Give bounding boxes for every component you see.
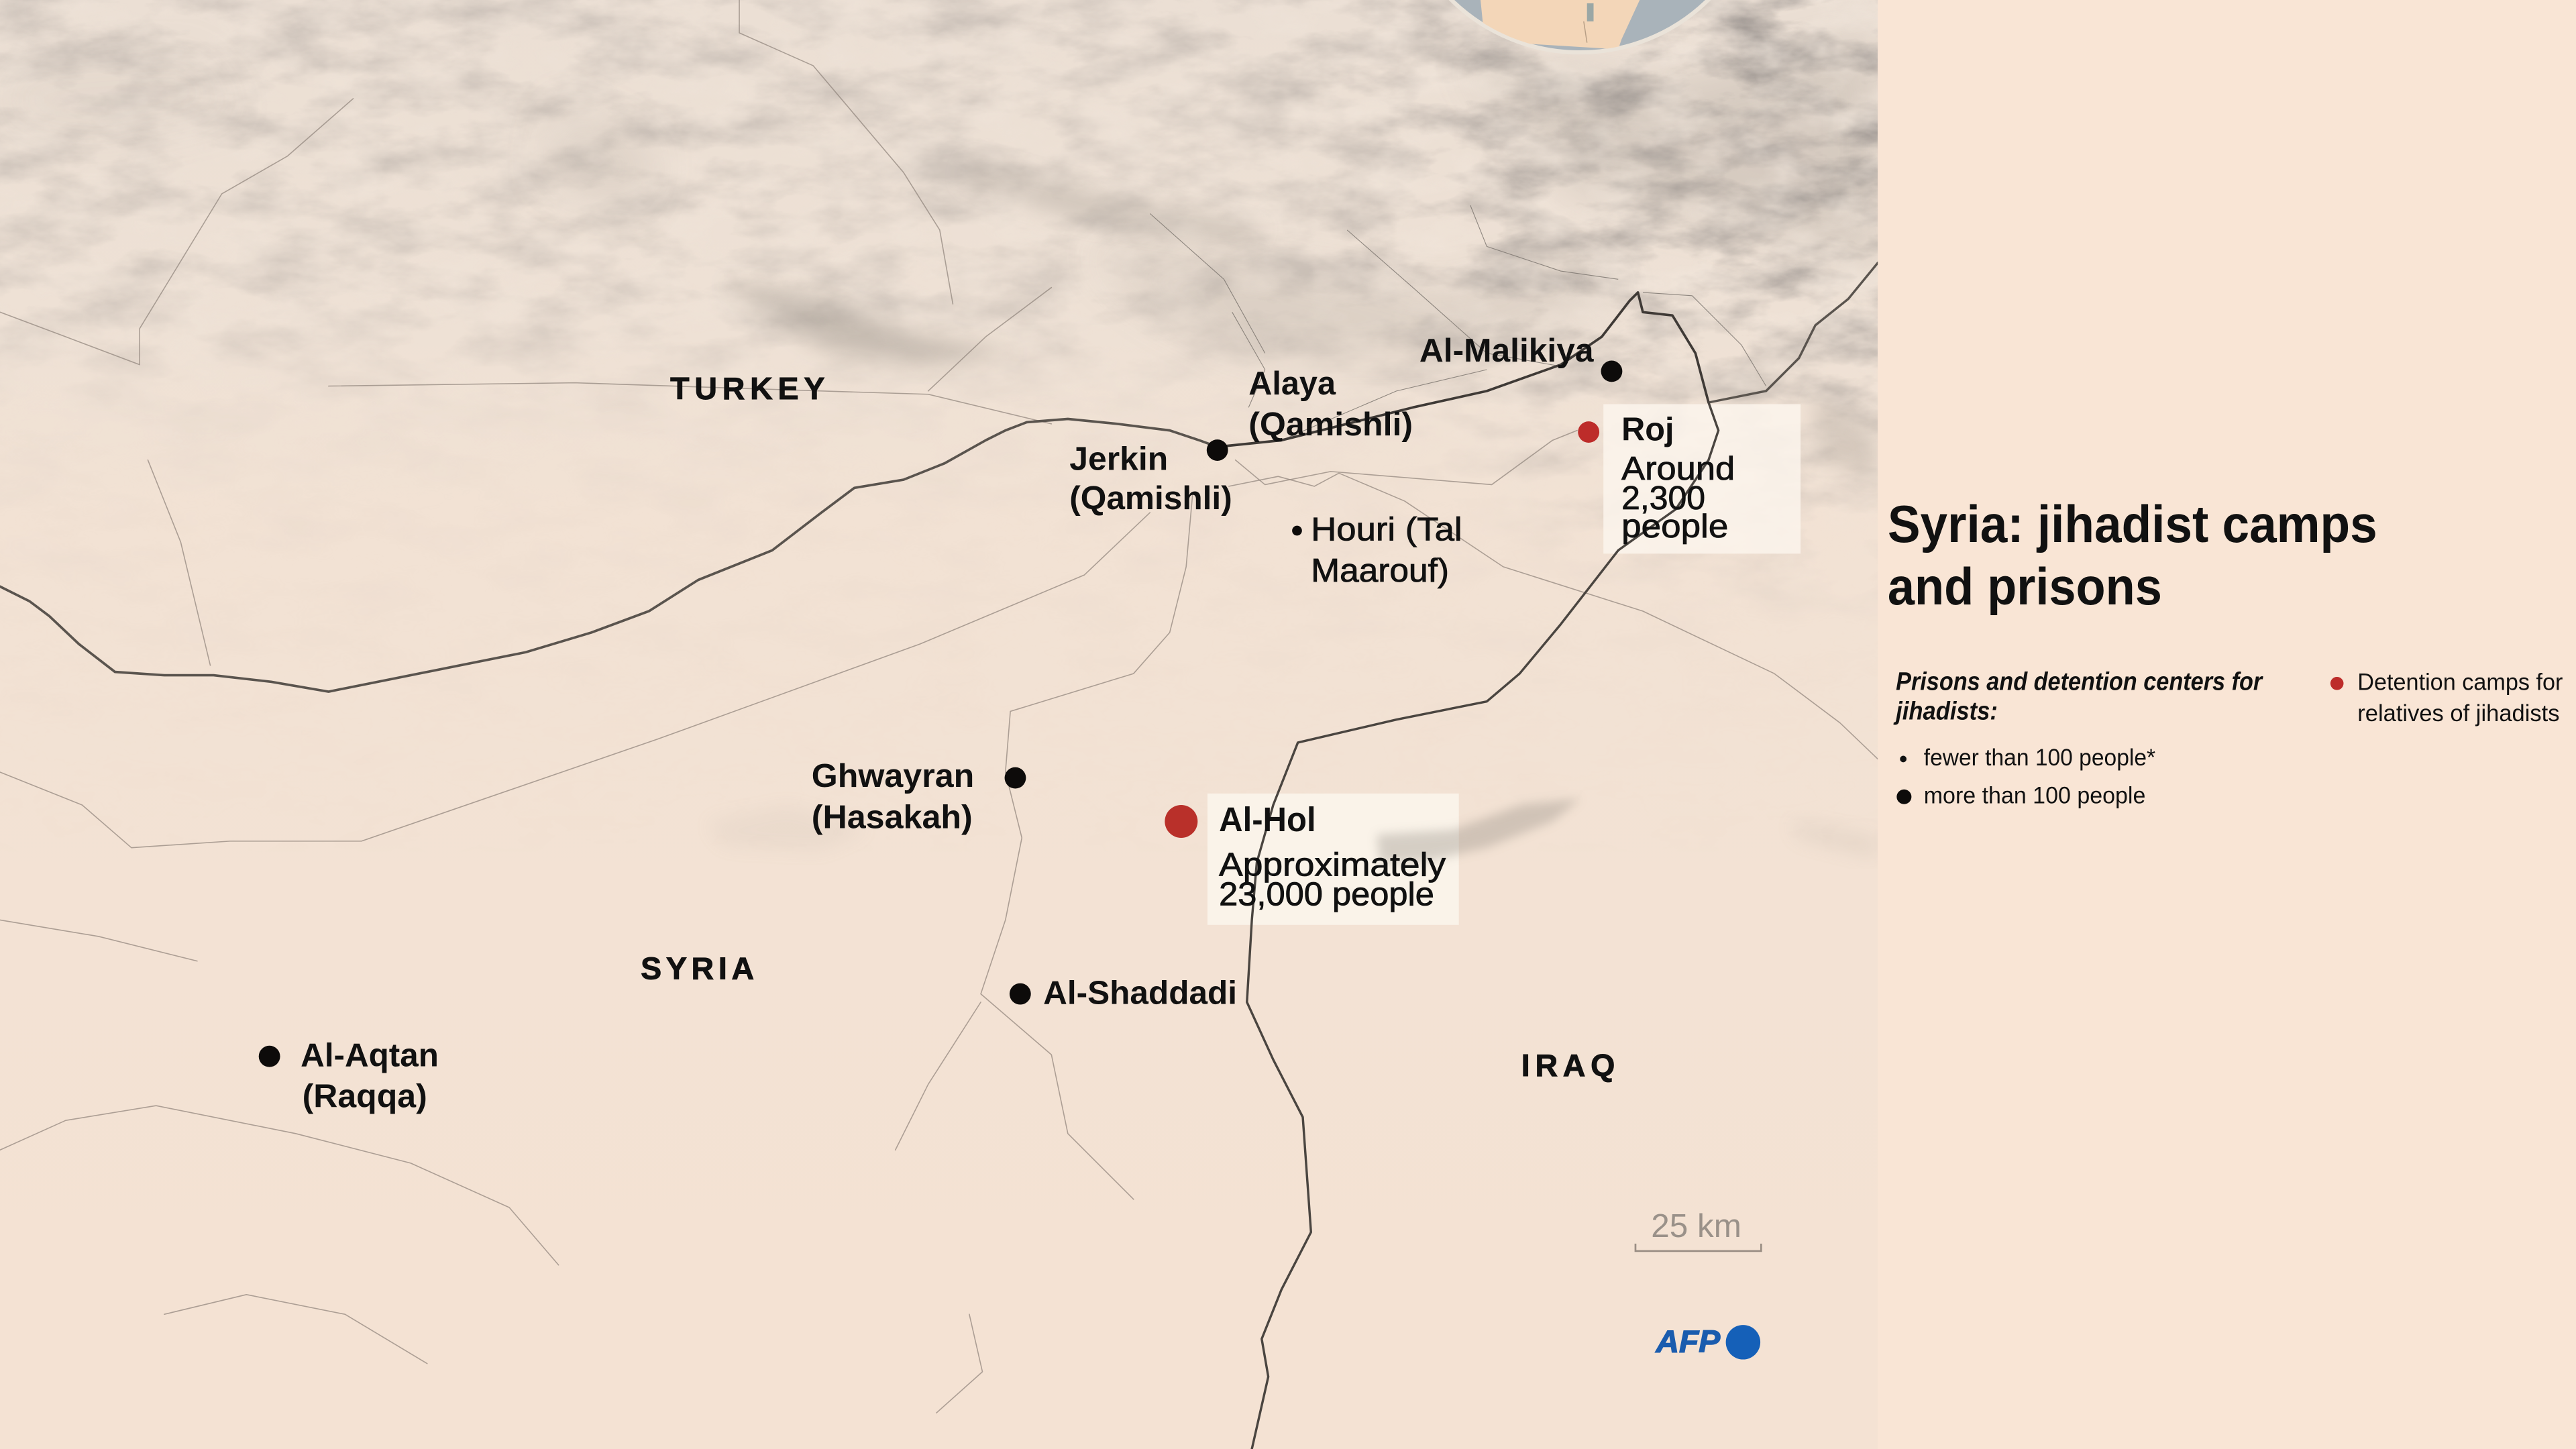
legend item: more than 100 people: more than 100 people <box>1924 782 2145 809</box>
site: Jerkin (Qamishli) <box>1069 439 1232 517</box>
title: and prisons <box>1888 557 2162 616</box>
site: Ghwayran (Hasakah): (Hasakah) <box>812 799 973 835</box>
site: Houri (Tal Maarouf) <box>1292 512 1462 589</box>
land base <box>0 0 1878 470</box>
site: Al-Hol camp: Al-Hol <box>1219 800 1316 839</box>
site: Ghwayran (Hasakah) <box>812 758 1026 835</box>
legend: prisons and detention centers <box>1893 668 2263 809</box>
site: Al-Hol camp: 23,000 people <box>1219 876 1434 912</box>
legend item: fewer than 100 people: fewer than 100 people* <box>1924 744 2155 771</box>
rivers and internal boundaries <box>0 0 1878 1413</box>
site: Al-Aqtan (Raqqa): (Raqqa) <box>303 1079 427 1115</box>
legend: detention camps for relatives <box>2330 669 2563 727</box>
legend heading: jihadists: <box>1893 698 1998 726</box>
desert shading near Al-Hol <box>1377 798 1580 863</box>
site: Ghwayran (Hasakah): Ghwayran <box>812 758 974 794</box>
site: Al-Aqtan (Raqqa) <box>259 1037 439 1115</box>
title <box>1888 494 2377 616</box>
country borders <box>0 263 1878 1449</box>
site: Al-Malikiya <box>1419 333 1622 382</box>
site: Al-Shaddadi: Al-Shaddadi <box>1043 975 1237 1011</box>
site: Roj camp: people <box>1621 508 1728 545</box>
AFP logo <box>1656 1324 1760 1360</box>
scale bar: 25 km: 25 km <box>1651 1208 1741 1244</box>
title: Syria: jihadist camps <box>1888 494 2377 553</box>
scale bar: 25 km <box>1635 1208 1761 1251</box>
site: Roj camp: 2,300 <box>1621 480 1705 517</box>
site: Roj camp: Around <box>1621 451 1735 487</box>
site: Roj camp: Roj <box>1621 411 1674 447</box>
callout box: Roj <box>1603 404 1801 553</box>
callout box: Al-Hol <box>1208 794 1459 925</box>
right panel background <box>1878 0 2576 1449</box>
site: Jerkin (Qamishli): (Qamishli) <box>1069 480 1232 517</box>
legend heading: Prisons and detention centers for <box>1896 668 2263 696</box>
site: Roj camp <box>1578 411 1735 545</box>
country label: Iraq: IRAQ <box>1521 1048 1615 1083</box>
site: Jerkin (Qamishli): Jerkin <box>1069 441 1168 477</box>
site: Al-Aqtan (Raqqa): Al-Aqtan <box>301 1037 439 1073</box>
relief texture <box>0 0 1878 1449</box>
legend: detention camps for relatives: Detention camps for <box>2357 669 2563 696</box>
mountain shading <box>0 33 1878 857</box>
site: Houri (Tal Maarouf): Houri (Tal <box>1311 512 1462 548</box>
site: Al-Hol camp: Approximately <box>1219 847 1446 883</box>
legend heading <box>1893 668 2263 726</box>
AFP logo: AFP <box>1656 1324 1721 1359</box>
map: terrain, borders and rivers <box>0 0 1878 1449</box>
locator globe inset <box>1397 0 1763 52</box>
country label: Turkey: TURKEY <box>670 371 824 406</box>
site: Alaya (Qamishli): (Qamishli) <box>1248 407 1413 443</box>
country label: Syria: SYRIA <box>641 951 754 986</box>
site: Al-Hol camp <box>1165 800 1446 912</box>
site: Houri (Tal Maarouf): Maarouf) <box>1311 553 1449 589</box>
site: Alaya (Qamishli): Alaya <box>1248 366 1336 402</box>
legend: detention camps for relatives: relatives of jihadists <box>2357 700 2560 727</box>
site: Alaya (Qamishli) <box>1248 366 1413 443</box>
site: Al-Malikiya: Al-Malikiya <box>1419 333 1594 369</box>
